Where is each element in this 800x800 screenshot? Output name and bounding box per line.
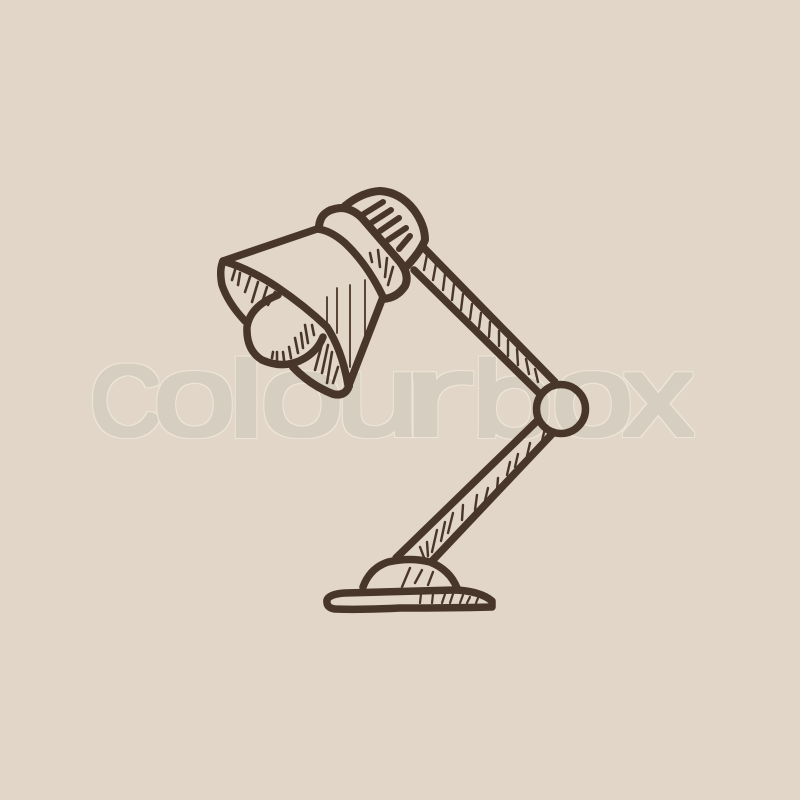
watermark text: u	[335, 332, 420, 460]
watermark text: x	[623, 332, 694, 460]
lamp base dome	[363, 560, 457, 588]
watermark text	[90, 332, 694, 460]
watermark text: C	[90, 345, 161, 456]
lower arm	[396, 421, 553, 560]
shade hatching	[232, 250, 393, 383]
base plate hatching	[420, 594, 478, 603]
lamp shade	[221, 229, 383, 395]
cap ribs	[362, 202, 410, 249]
desk lamp illustration	[221, 191, 585, 609]
light bulb	[247, 295, 323, 365]
joint circle	[536, 384, 586, 434]
watermark text: o	[260, 332, 344, 460]
watermark text: b	[471, 339, 553, 459]
watermark text: o	[551, 332, 634, 460]
upper arm hatching	[424, 255, 538, 382]
collar	[319, 208, 407, 299]
watermark text: l	[225, 339, 267, 459]
lamp base plate	[327, 590, 492, 609]
lamp cap	[345, 191, 425, 266]
upper arm	[414, 248, 555, 393]
watermark text: o	[153, 332, 236, 460]
lower arm hatching	[420, 428, 545, 560]
dome hatching	[402, 568, 433, 587]
watermark text: r	[400, 332, 475, 460]
